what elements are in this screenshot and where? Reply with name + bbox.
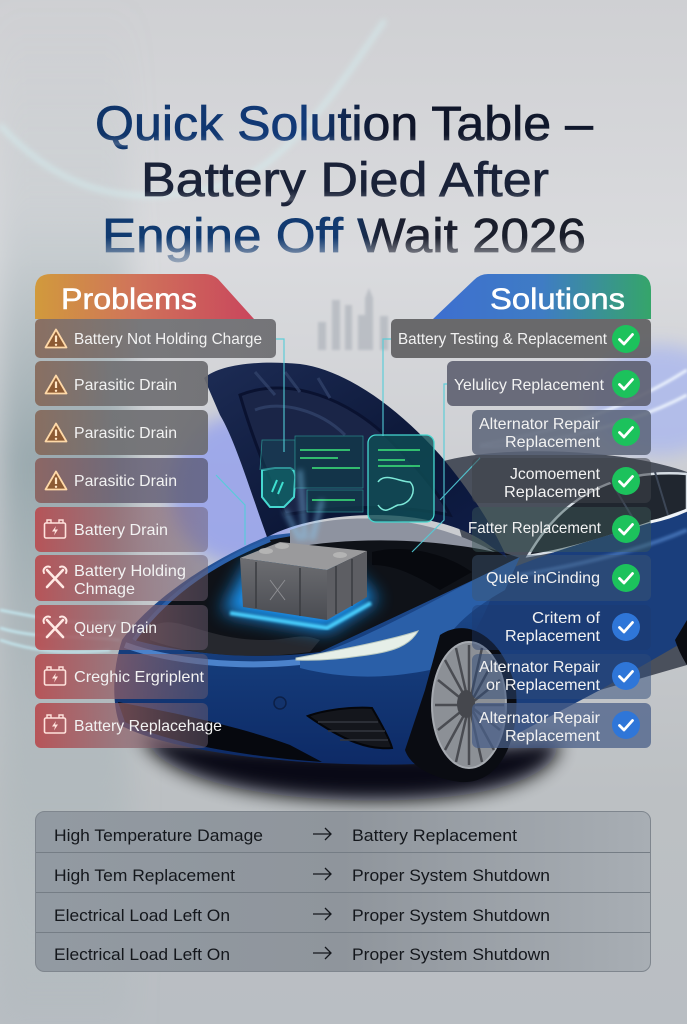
problem row 1 (35, 319, 276, 358)
table row 1 (54, 826, 517, 845)
solution row 9: Replacement (505, 728, 601, 745)
solution row 4: Jcomoement (510, 466, 601, 483)
solution row 6: Quele inCinding (486, 570, 600, 587)
car front body (114, 530, 500, 765)
problem row 6: Chmage (74, 581, 135, 598)
ground shadow (140, 735, 560, 801)
solution row 2 (447, 361, 651, 406)
problem row 3: Parasitic Drain (74, 425, 177, 442)
fender (300, 557, 520, 677)
problem row 6: Battery Holding (74, 563, 186, 580)
solution row 3 (472, 410, 651, 455)
solution row 1: Battery Testing & Replacement (398, 331, 608, 348)
problem row 9 (35, 703, 222, 748)
table row 2: High Tem Replacement (54, 866, 235, 885)
lower grille (118, 702, 322, 762)
problems header: Problems (61, 283, 197, 316)
solution row 5: Fatter Replacement (468, 520, 602, 537)
solution row 7: Critem of (532, 610, 601, 627)
city skyline (318, 288, 388, 350)
solution row 6 (472, 555, 651, 601)
sensor (274, 697, 286, 709)
solutions header: Solutions (490, 283, 625, 316)
summary table (36, 812, 650, 972)
rear wheel hint (675, 620, 687, 665)
solution row 2: Yelulicy Replacement (454, 377, 605, 394)
holographic panels (260, 435, 434, 522)
solution row 8 (472, 654, 651, 699)
table row 3 (54, 906, 550, 925)
solution row 3: Alternator Repair (479, 416, 601, 433)
car rear body and windows (400, 451, 687, 735)
solution row 4: Replacement (504, 484, 601, 501)
solution row 9: Alternator Repair (479, 710, 601, 727)
solution row 5 (468, 507, 651, 552)
solution row 8: or Replacement (486, 677, 601, 694)
problem row 2 (35, 361, 208, 406)
problem row 8: Creghic Ergriplent (74, 669, 205, 686)
problem row 1: Battery Not Holding Charge (74, 331, 262, 348)
problem row 4: Parasitic Drain (74, 473, 177, 490)
table row 3: Electrical Load Left On (54, 906, 230, 925)
under-hood dark parts (372, 549, 472, 590)
solution row 1 (391, 319, 651, 358)
headlight (296, 631, 418, 660)
problem row 5 (35, 507, 208, 552)
open hood (204, 363, 507, 558)
solution row 8: Alternator Repair (479, 659, 601, 676)
table row 4: Electrical Load Left On (54, 945, 230, 964)
battery with glow (222, 470, 378, 632)
problem row 3 (35, 410, 208, 455)
callout connector lines (216, 339, 480, 552)
table row 2 (54, 866, 550, 885)
table row 2: Proper System Shutdown (352, 866, 550, 885)
solutions header (433, 274, 651, 319)
table row 1: High Temperature Damage (54, 826, 263, 845)
problem row 8 (35, 654, 208, 699)
engine bay (134, 532, 520, 656)
panel: solutions (391, 274, 651, 748)
table row 3: Proper System Shutdown (352, 906, 550, 925)
solution row 7 (472, 605, 651, 650)
problem row 5: Battery Drain (74, 522, 168, 539)
title: Engine Off Wait 2026 (102, 210, 586, 263)
title: Battery Died After (141, 154, 549, 207)
problem row 7: Query Drain (74, 620, 157, 637)
title (95, 98, 593, 263)
problems header (35, 274, 254, 319)
solution row 7: Replacement (505, 628, 601, 645)
problem row 7 (35, 605, 208, 650)
problem row 2: Parasitic Drain (74, 377, 177, 394)
fog vent (308, 708, 392, 748)
solution row 9 (472, 703, 651, 748)
table row 1: Battery Replacement (352, 826, 517, 845)
solution row 4 (472, 458, 651, 503)
title: Quick Solution Table – (95, 98, 593, 151)
table row 4 (54, 945, 550, 964)
front wheel (405, 628, 517, 782)
problem row 4 (35, 458, 208, 503)
problem row 6 (35, 555, 208, 601)
solution row 3: Replacement (505, 434, 601, 451)
problem row 9: Battery Replacehage (74, 718, 222, 735)
panel: problems (35, 274, 276, 748)
car illustration (114, 339, 687, 801)
table row 4: Proper System Shutdown (352, 945, 550, 964)
